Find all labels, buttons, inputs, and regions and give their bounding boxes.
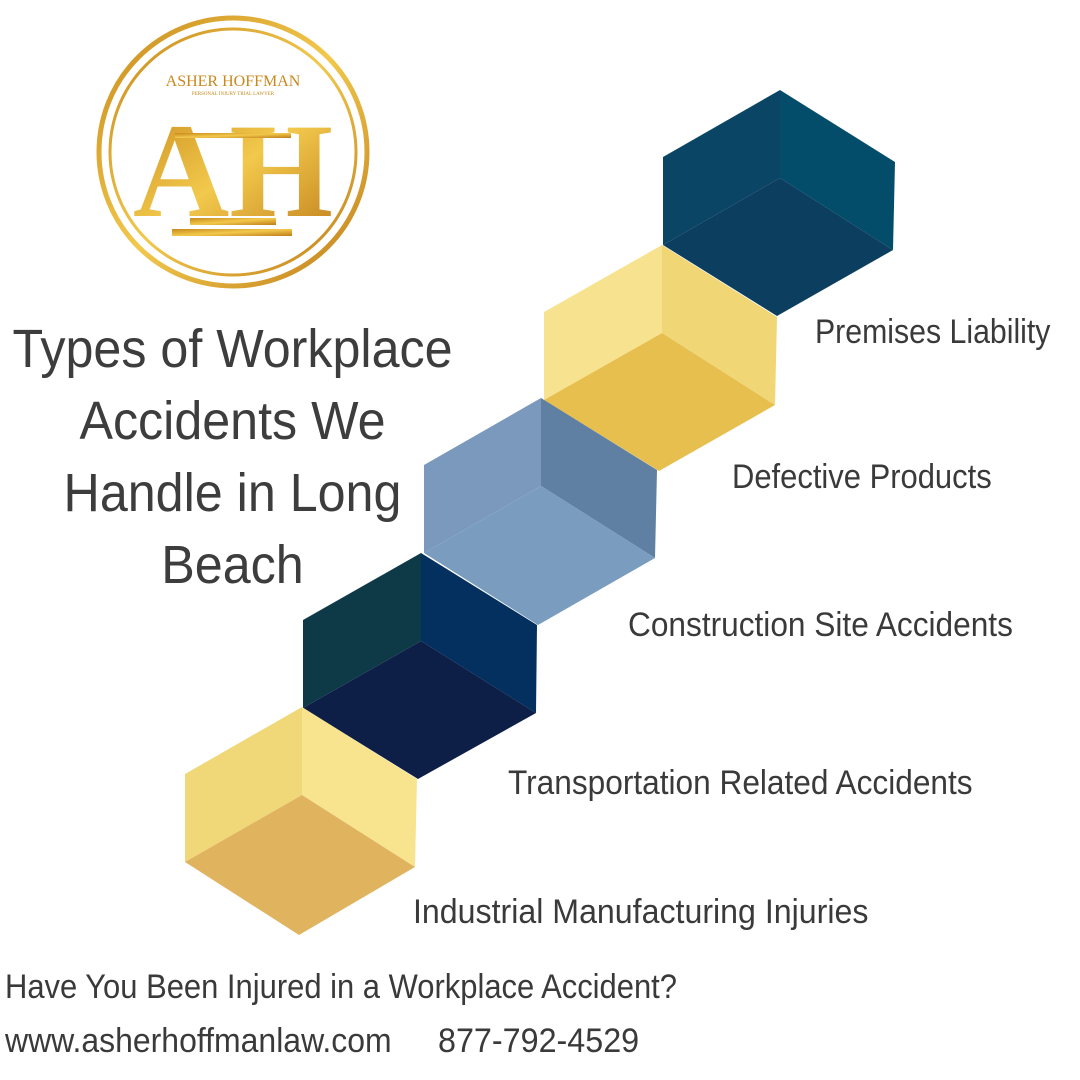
label: defective products: Defective Products — [732, 458, 992, 496]
logo: PERSONAL INJURY TRIAL LAWYER — [192, 92, 275, 97]
title: Accidents We — [79, 391, 386, 451]
label: construction: Construction Site Accidents — [628, 606, 1013, 644]
logo — [96, 16, 370, 288]
label: industrial: Industrial Manufacturing Injuries — [413, 893, 868, 931]
title: Beach — [161, 535, 304, 595]
logo: ASHER HOFFMAN — [166, 73, 301, 90]
label: premises liability: Premises Liability — [815, 313, 1050, 351]
label: transportation: Transportation Related Accidents — [508, 764, 973, 802]
title — [12, 319, 453, 595]
logo: AH — [133, 97, 333, 246]
footer phone: 877-792-4529 — [438, 1022, 639, 1060]
footer question: Have You Been Injured in a Workplace Accident? — [5, 968, 677, 1006]
title: Handle in Long — [64, 463, 401, 523]
title: Types of Workplace — [12, 319, 453, 379]
footer url: www.asherhoffmanlaw.com — [5, 1022, 392, 1060]
